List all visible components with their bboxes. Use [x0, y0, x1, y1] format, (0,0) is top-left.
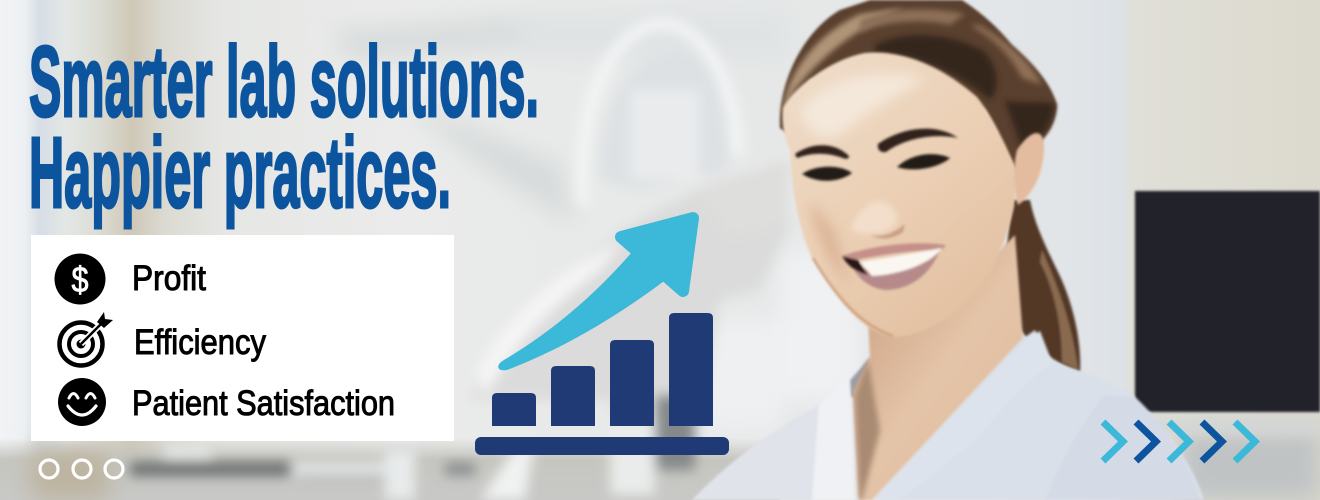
icon: smile [58, 378, 106, 426]
ear [1014, 133, 1044, 205]
baseline [475, 437, 729, 455]
icon: dollar: $ [72, 259, 88, 300]
forehead highlight [800, 74, 925, 137]
uniform [692, 330, 1204, 500]
title: Happier practices. [29, 117, 451, 229]
hair [780, 0, 1057, 172]
lamp interior [600, 50, 728, 190]
mouth [842, 243, 946, 290]
nose shadow [870, 224, 905, 238]
chart: growth bars with arrow [475, 218, 729, 455]
jaw edge [813, 258, 893, 336]
lamp arm [582, 24, 738, 205]
ponytail [1007, 200, 1080, 372]
text: Smarter lab solutions. [29, 26, 539, 138]
neck [853, 235, 1023, 500]
label: efficiency: Efficiency [134, 323, 266, 362]
chevrons [1103, 422, 1255, 461]
icon: target [60, 312, 113, 366]
face [782, 53, 1017, 337]
arrow [498, 218, 693, 370]
monitor [1135, 191, 1320, 412]
cheek shading [810, 200, 850, 285]
eyebrows [795, 129, 958, 159]
label: profit: Profit [132, 259, 206, 298]
bars [492, 313, 713, 426]
label: patient satisfaction: Patient Satisfaction [132, 384, 395, 423]
neck shadow [855, 360, 880, 500]
title [29, 26, 539, 229]
dental chair [470, 165, 790, 420]
photo: smiling dental professional [692, 0, 1204, 500]
nose [851, 202, 898, 234]
eyes [802, 154, 950, 181]
panel: benefits [31, 235, 454, 441]
icon: dollar [54, 254, 106, 304]
pagination dots [40, 460, 123, 478]
